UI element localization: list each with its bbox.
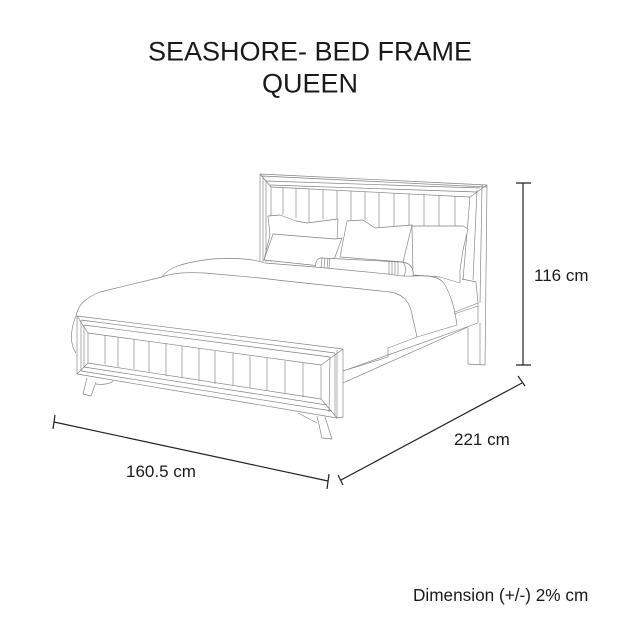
title: SEASHORE- BED FRAME [148,36,472,66]
title [148,36,472,98]
dimension lines [53,183,531,489]
dimension labels: 116 cm [534,266,588,285]
mattress and duvet [72,258,478,383]
legs [83,378,332,439]
dimension labels: Dimension (+/-) 2% cm [413,585,588,605]
bed drawing [72,174,487,439]
bolster cushion [315,258,413,277]
dimension labels: 160.5 cm [126,462,196,481]
footboard [77,316,343,418]
title: QUEEN [262,68,358,98]
pillows [264,215,468,283]
headboard [260,174,487,365]
dimension labels: 221 cm [454,430,510,449]
dimension labels [126,266,588,605]
